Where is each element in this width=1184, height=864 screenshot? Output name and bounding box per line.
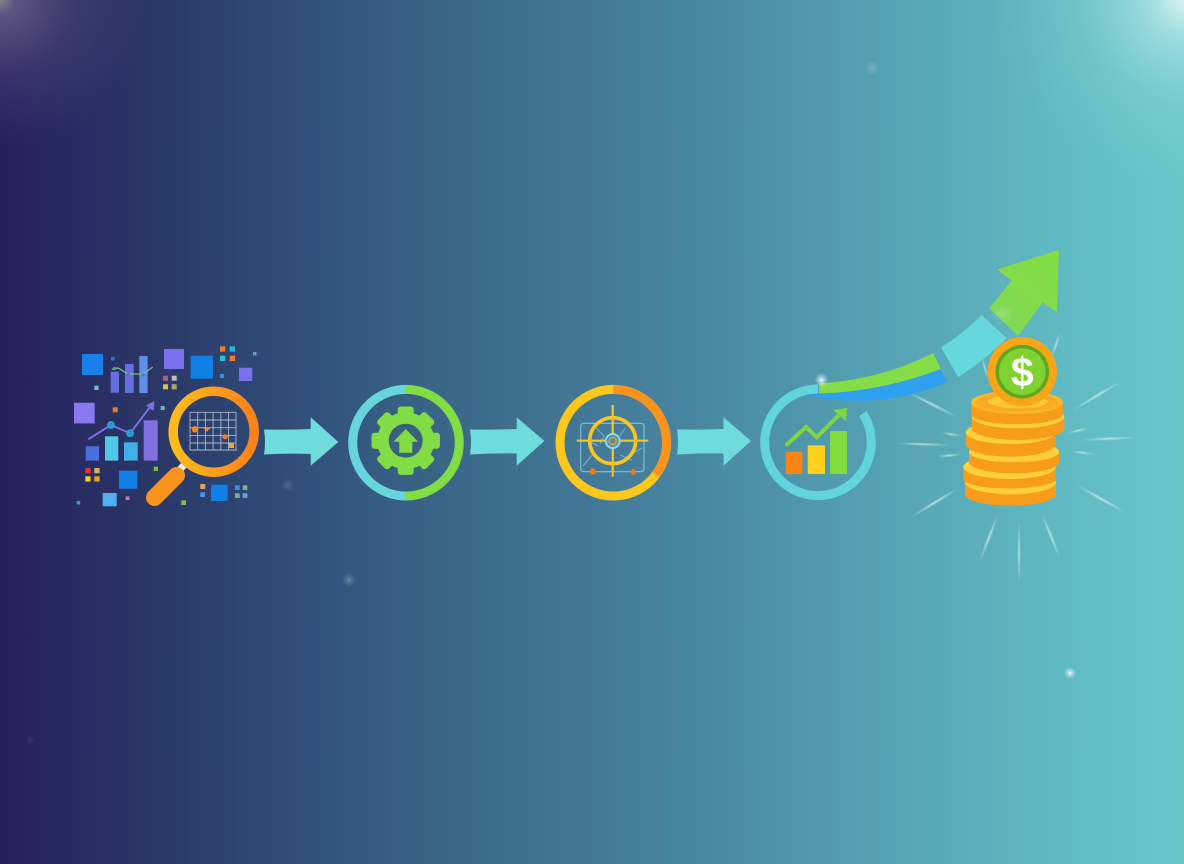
- green arrow head: [989, 250, 1059, 336]
- background sparkles: [25, 61, 1076, 745]
- magnifying glass: [154, 391, 254, 498]
- colored bars: [786, 431, 847, 474]
- arrow 2: [470, 417, 544, 466]
- dollar coin: $: [1011, 349, 1034, 395]
- teal segment: [941, 315, 1007, 377]
- lower bar chart: [86, 420, 158, 461]
- ring: [560, 389, 667, 496]
- coin 1: [971, 402, 1063, 424]
- up arrow: [393, 429, 418, 453]
- radiating light rays: [895, 333, 1137, 583]
- map panel: [581, 423, 644, 472]
- scattered data squares: [74, 346, 256, 506]
- step 2: gear optimization icon: [353, 389, 459, 496]
- target centre: [606, 434, 620, 448]
- coin stack: [963, 390, 1064, 506]
- step 1: data analysis cluster: [74, 346, 256, 506]
- rising purple trend line: [88, 401, 154, 439]
- blue band: [805, 370, 947, 401]
- small bar chart with line: [111, 356, 153, 393]
- green band: [819, 353, 941, 394]
- orange markers: [590, 468, 596, 475]
- coin 4: [969, 452, 1059, 473]
- step 3: target icon: [560, 389, 667, 496]
- magnifier grid: [190, 412, 237, 450]
- arrow 1: [264, 417, 338, 466]
- coin 2: [972, 417, 1064, 440]
- open ring: [765, 389, 871, 496]
- step 4: growth chart icon: [765, 389, 871, 496]
- target crosshair: [577, 405, 648, 477]
- gear: [372, 406, 440, 475]
- sparkle on the band: [814, 373, 828, 387]
- coin 3: [966, 432, 1056, 457]
- dollar coin: [988, 337, 1057, 406]
- curved growth band: [805, 250, 1059, 401]
- green trend arrow: [787, 408, 847, 444]
- coin 5: [963, 467, 1056, 488]
- arrow 3: [677, 417, 751, 466]
- coin 6: [965, 482, 1056, 506]
- ring: [353, 389, 459, 496]
